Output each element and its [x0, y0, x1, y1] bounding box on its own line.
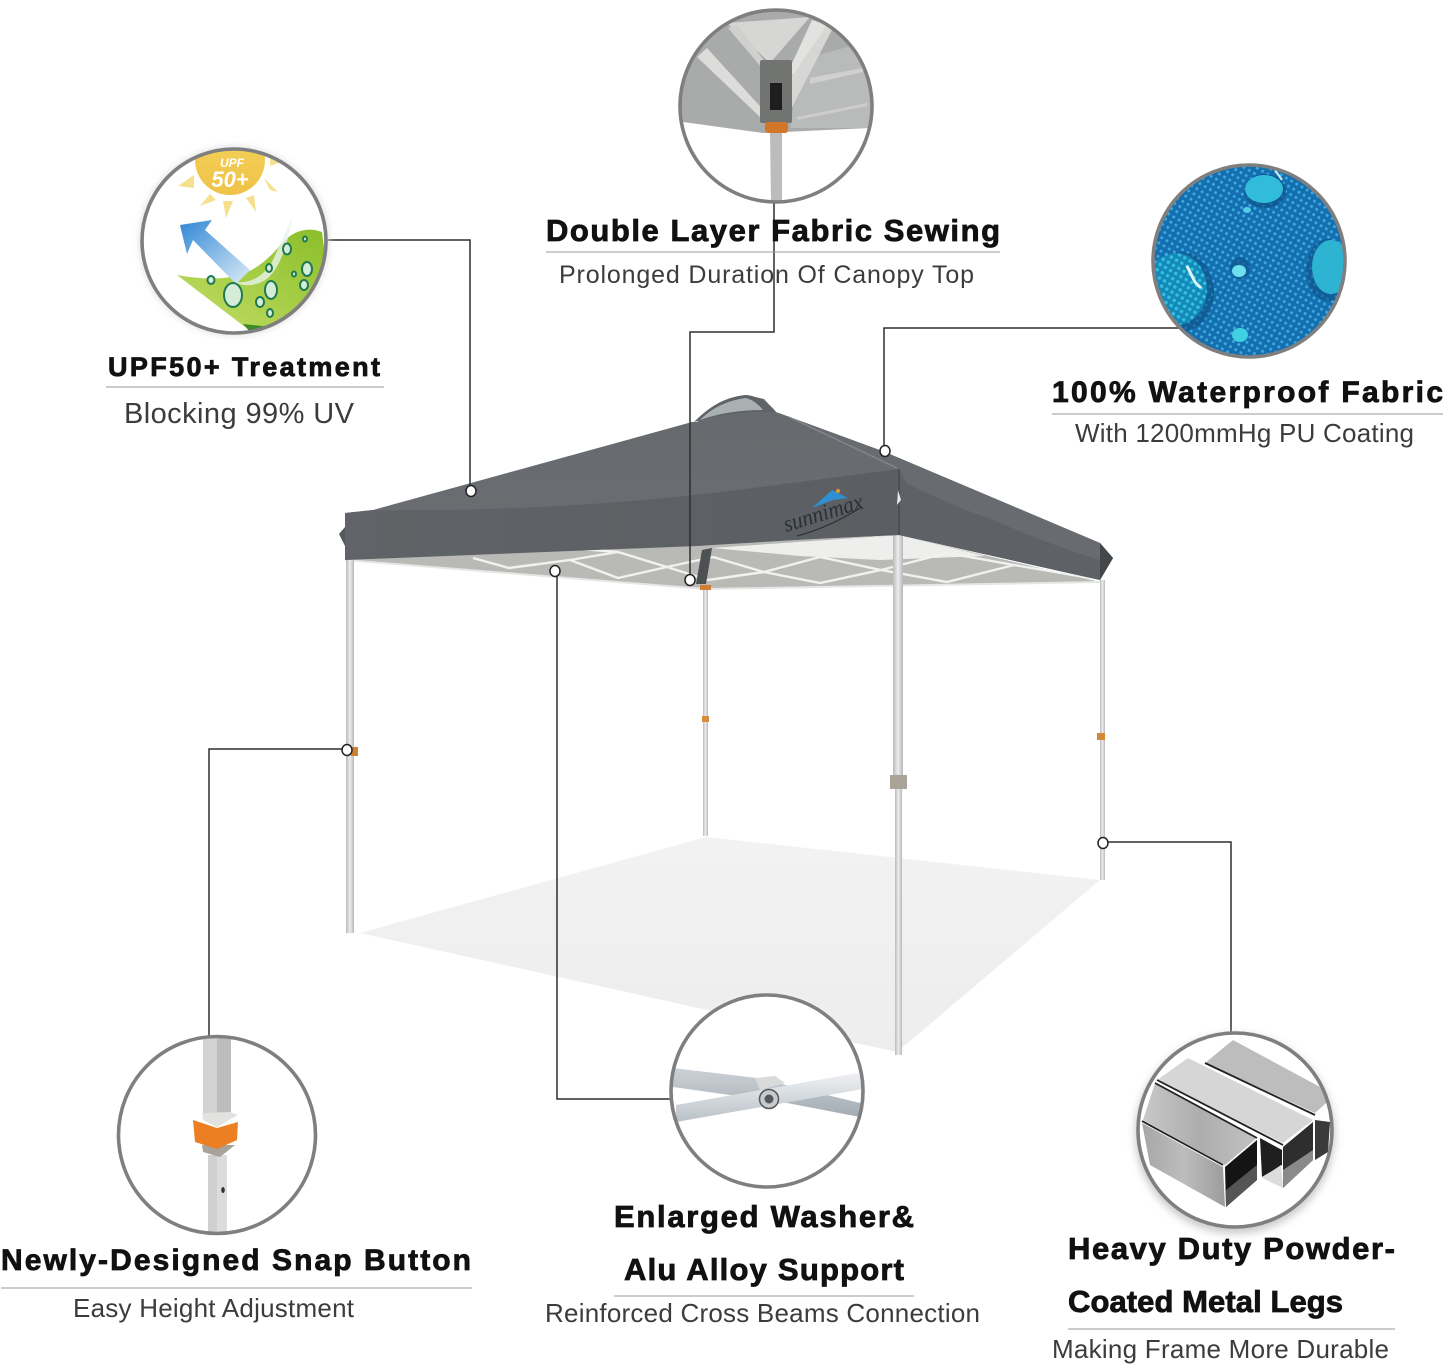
left leg: [346, 560, 358, 933]
vent window: [694, 395, 776, 422]
icon: snap button pole: [118, 1036, 316, 1235]
ground shadow: [360, 837, 1100, 1052]
text block: Heavy Duty Powder-Coated Metal Legs: Coated Metal Legs: [1068, 1284, 1343, 1319]
text block: Enlarged Washer and Alu Alloy Support: [545, 1199, 980, 1328]
icon: UPF50+ sun and fabric: UPF: [220, 156, 245, 170]
text block: Enlarged Washer and Alu Alloy Support: Alu Alloy Support: [624, 1252, 904, 1287]
leader line: UPF: [327, 240, 476, 496]
leader line: metal legs: [1098, 838, 1231, 1032]
text block: 100% Waterproof Fabric: 100% Waterproof Fabric: [1052, 376, 1443, 409]
icon: waterproof fabric: [1145, 165, 1350, 357]
canopy roof: [339, 395, 1113, 580]
front valance: [345, 469, 899, 560]
text block: Newly-Designed Snap Button: Easy Height Adjustment: [73, 1293, 355, 1323]
text block: Enlarged Washer and Alu Alloy Support: Reinforced Cross Beams Connection: [545, 1298, 980, 1328]
text block: Newly-Designed Snap Button: Newly-Designed Snap Button: [1, 1244, 471, 1277]
icon: washer cross beams: [671, 995, 863, 1187]
text block: Enlarged Washer and Alu Alloy Support: Enlarged Washer&: [614, 1199, 914, 1234]
back leg: [702, 588, 709, 836]
icon: UPF50+ sun and fabric: [140, 125, 335, 335]
text block: UPF50+ Treatment: Blocking 99% UV: [124, 398, 355, 430]
leader line: double layer: [685, 203, 774, 586]
front leg: [890, 533, 907, 1055]
text block: Heavy Duty Powder-Coated Metal Legs: Heavy Duty Powder-: [1068, 1231, 1395, 1266]
icon: UPF50+ sun and fabric: 50+: [211, 167, 249, 192]
text block: Double Layer Fabric Sewing: Double Layer Fabric Sewing: [546, 213, 1000, 248]
leader line: washer: [550, 566, 671, 1099]
text block: Double Layer Fabric Sewing: [546, 213, 1000, 289]
text block: Newly-Designed Snap Button: [1, 1244, 472, 1323]
text block: Heavy Duty Powder-Coated Metal Legs: [1052, 1231, 1395, 1364]
text block: 100% Waterproof Fabric: With 1200mmHg PU Coating: [1075, 418, 1414, 448]
canopy tent: [339, 395, 1113, 1055]
text block: Double Layer Fabric Sewing: Prolonged Duration Of Canopy Top: [559, 261, 974, 289]
right valance: [776, 412, 1113, 580]
canopy underside with lattice: [345, 535, 1100, 590]
brand logo: sunnimax: [780, 489, 867, 537]
text block: UPF50+ Treatment: UPF50+ Treatment: [108, 352, 380, 382]
text block: UPF50+ Treatment: [106, 352, 384, 430]
icon: double layer fabric: [670, 0, 880, 203]
right leg: [1097, 580, 1105, 880]
leader line: snap button: [209, 744, 352, 1037]
leader line: waterproof: [880, 328, 1180, 456]
icon: metal tubes: [1135, 1033, 1335, 1234]
text block: Heavy Duty Powder-Coated Metal Legs: Making Frame More Durable: [1052, 1334, 1389, 1364]
text block: 100% Waterproof Fabric: [1052, 376, 1443, 448]
